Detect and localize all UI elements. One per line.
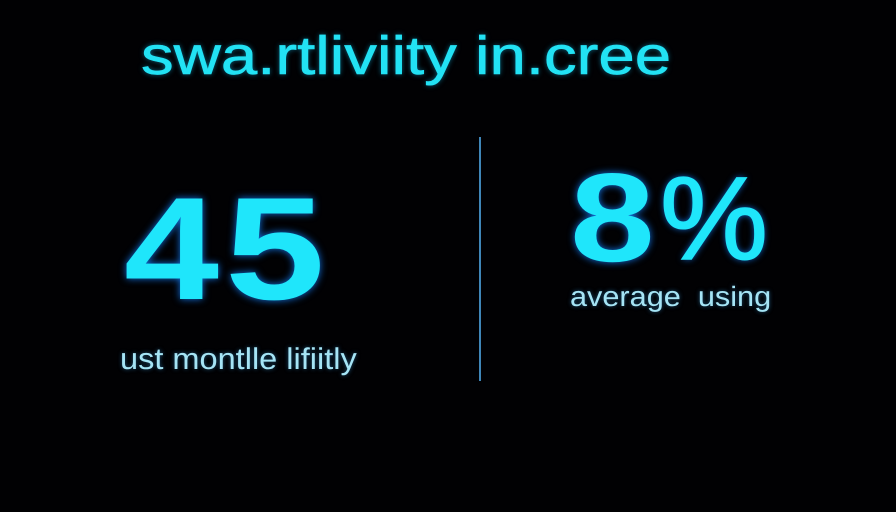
caption: left stat: ust montlle lifiitly bbox=[120, 343, 357, 376]
big number: 45 bbox=[120, 167, 326, 330]
title: swa.rtliviity in.cree bbox=[141, 26, 671, 86]
big number: 45: 5 bbox=[225, 167, 325, 330]
big number: 45: 4 bbox=[124, 167, 219, 330]
big number: 8%: 8 bbox=[570, 147, 655, 288]
caption: right stat: average using bbox=[570, 281, 771, 312]
big number: 8% bbox=[569, 147, 770, 288]
divider bbox=[479, 137, 481, 381]
big number: 8%: % bbox=[660, 153, 768, 285]
